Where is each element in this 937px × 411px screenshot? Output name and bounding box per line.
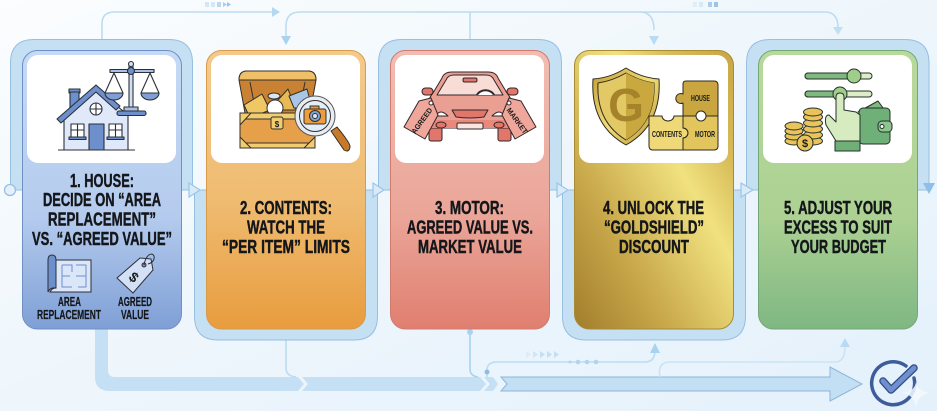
heading: step 3 [407,197,533,257]
halo: card 4 frame [562,190,746,340]
labels: area replacement and agreed value: AGREED [118,294,152,309]
heading: step 4: DISCOUNT [619,236,689,257]
icon: price tag: $ [126,268,142,286]
icon: puzzle pieces: CONTENTS [652,129,682,139]
labels: area replacement and agreed value: AREA [58,294,81,309]
bottom connectors [286,329,850,377]
heading: step 3: 3. MOTOR: [435,197,504,218]
heading: step 5: YOUR BUDGET [791,236,886,257]
heading: step 4: 4. UNLOCK THE [603,197,704,218]
labels: area replacement and agreed value: REPLACEMENT [37,307,101,322]
heading: step 1 [32,170,172,249]
heading: step 2: WATCH THE [247,216,325,238]
icon: puzzle pieces: HOUSE [691,93,710,103]
arrow: exit down [923,183,935,194]
arrow: step 4 to 5 [741,183,753,197]
icon: price tag [117,254,154,293]
panel: step 1 house [22,50,182,329]
icon: car with tags: AGREED [409,106,435,136]
labels: area replacement and agreed value: VALUE [121,307,149,322]
heading: step 1: DECIDE ON “AREA [43,189,161,210]
heading: step 1: VS. “AGREED VALUE” [32,228,172,249]
heading: step 1: 1. HOUSE: [70,170,134,191]
start node [4,184,16,196]
labels: area replacement and agreed value [37,294,152,322]
heading: step 1: REPLACEMENT” [48,208,156,230]
halo: card 1 frame [10,40,192,190]
panel: step 2 contents [206,50,366,329]
halo: card 5 frame [746,40,929,190]
icon: car with tags: MARKET [505,106,530,136]
top connector: card 1 to card 2 [102,2,280,39]
heading: step 5 [784,197,892,257]
icon: treasure chest and magnifier: $ [275,120,280,129]
icon: puzzle pieces [649,81,718,150]
icon: car with tags [404,72,536,141]
icon: house and scales [57,62,159,150]
arrow: step 1 to 2 [189,183,200,197]
panel: step 3 motor [390,50,550,329]
heading: step 5: EXCESS TO SUIT [784,216,892,238]
panel: step 5 excess [758,50,918,329]
top connector: card 2 to card 4 and card 5 [281,2,843,45]
icon: sliders, coins, hand and wallet [785,69,892,151]
heading: step 5: 5. ADJUST YOUR [784,197,892,218]
icon: floor plan [48,255,91,292]
icon: puzzle pieces: MOTOR [695,129,715,139]
heading: step 3: AGREED VALUE VS. [407,216,533,238]
heading: step 3: MARKET VALUE [418,236,522,257]
heading: step 4 [603,197,704,257]
icon: gold shield [593,68,659,145]
icon: gold shield: G [608,79,644,131]
halo: card 3 frame [378,40,562,190]
halo: card 2 frame [194,190,378,340]
bottom pipe with arrow [95,329,862,401]
heading: step 4: “GOLDSHIELD” [604,216,704,238]
heading: step 2: 2. CONTENTS: [240,197,332,218]
icon: sliders, coins, hand and wallet: $ [802,138,808,150]
heading: step 2: “PER ITEM” LIMITS [222,236,350,257]
icon: treasure chest and magnifier [239,71,350,151]
icon: completion check mark [872,362,930,408]
arrow: step 3 to 4 [557,183,568,197]
arrow: step 2 to 3 [373,183,384,197]
panel: step 4 goldshield [574,50,734,329]
heading: step 2 [222,197,350,257]
